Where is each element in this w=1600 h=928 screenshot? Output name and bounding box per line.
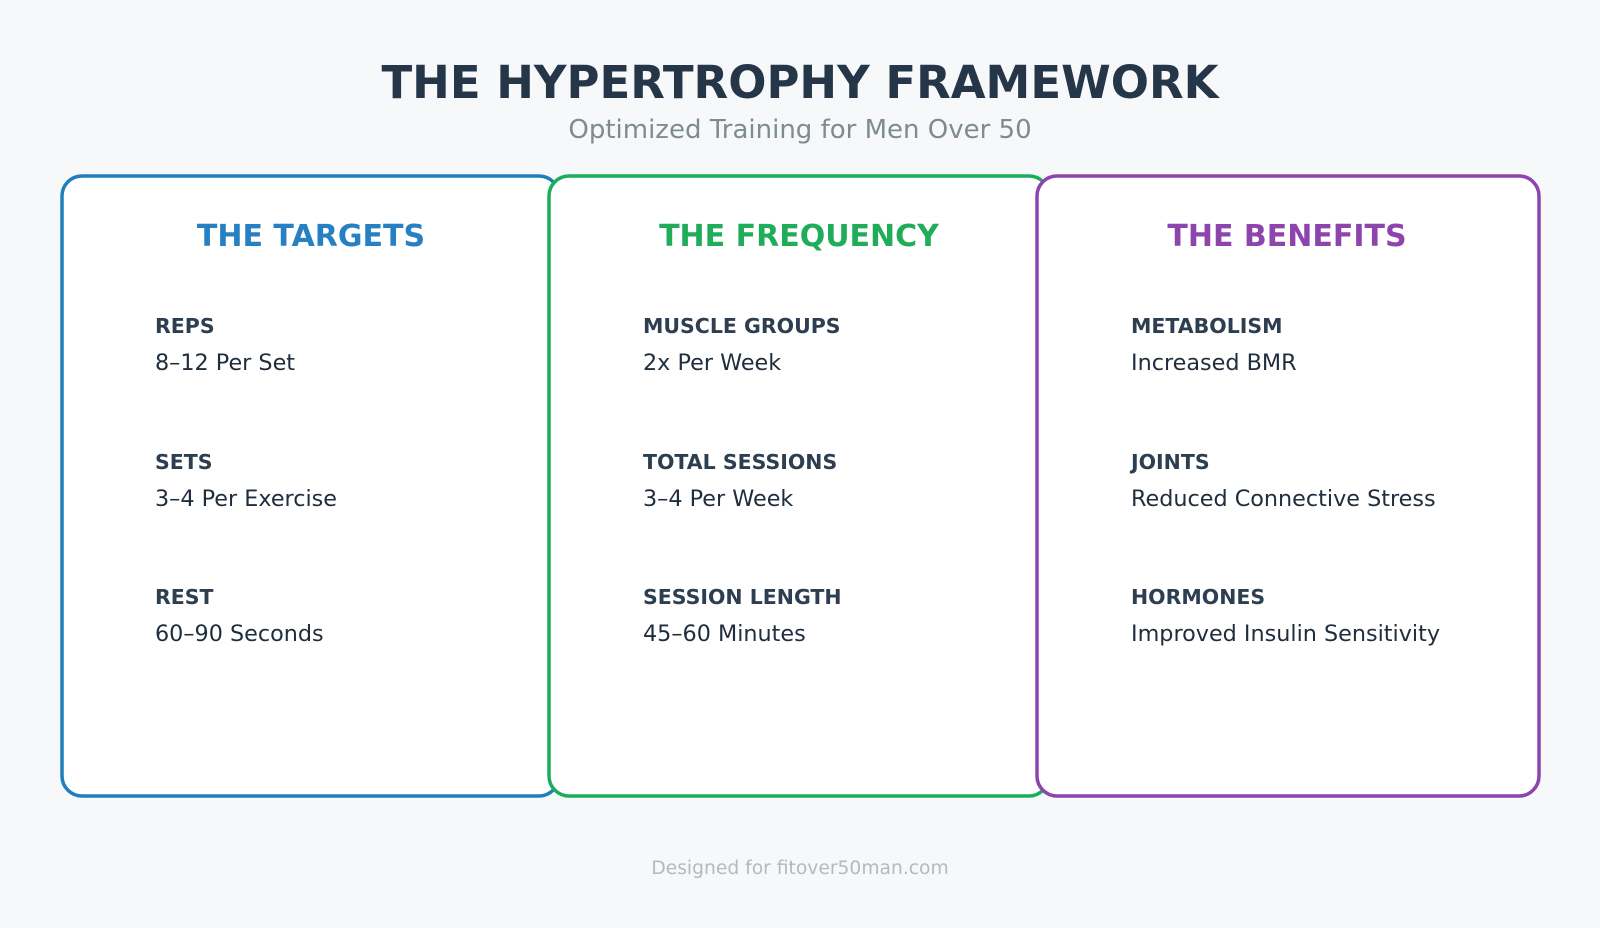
item: reps: REPS (155, 314, 215, 338)
panel: frequency (549, 176, 1049, 796)
item: joints: Reduced Connective Stress (1131, 486, 1436, 512)
item: metabolism (1131, 314, 1297, 376)
item: hormones (1131, 585, 1440, 647)
item: rest: REST (155, 585, 214, 609)
heading: frequency: THE FREQUENCY (659, 219, 940, 254)
item: sets: SETS (155, 450, 213, 474)
item: joints (1129, 450, 1436, 512)
item: sets: 3–4 Per Exercise (155, 486, 337, 512)
item: reps: 8–12 Per Set (155, 350, 295, 376)
item: muscle groups (643, 314, 841, 376)
item: reps (155, 314, 295, 376)
item: joints: JOINTS (1129, 450, 1210, 474)
item: muscle groups: MUSCLE GROUPS (643, 314, 841, 338)
panel: benefits (1037, 176, 1539, 796)
subtitle: Optimized Training for Men Over 50 (568, 115, 1032, 145)
item: hormones: Improved Insulin Sensitivity (1131, 621, 1440, 647)
item: session length (643, 585, 842, 647)
item: metabolism: Increased BMR (1131, 350, 1297, 376)
item: hormones: HORMONES (1131, 585, 1265, 609)
item: total sessions: 3–4 Per Week (643, 486, 793, 512)
title: THE HYPERTROPHY FRAMEWORK (381, 56, 1221, 109)
item: rest: 60–90 Seconds (155, 621, 324, 647)
item: muscle groups: 2x Per Week (643, 350, 781, 376)
item: rest (155, 585, 324, 647)
heading: targets: THE TARGETS (197, 219, 425, 254)
item: sets (155, 450, 337, 512)
item: total sessions (643, 450, 837, 512)
heading: benefits: THE BENEFITS (1167, 219, 1407, 254)
item: session length: SESSION LENGTH (643, 585, 842, 609)
item: total sessions: TOTAL SESSIONS (643, 450, 837, 474)
item: metabolism: METABOLISM (1131, 314, 1283, 338)
panel: targets (62, 176, 559, 796)
footer: Designed for fitover50man.com (651, 858, 949, 879)
item: session length: 45–60 Minutes (643, 621, 806, 647)
